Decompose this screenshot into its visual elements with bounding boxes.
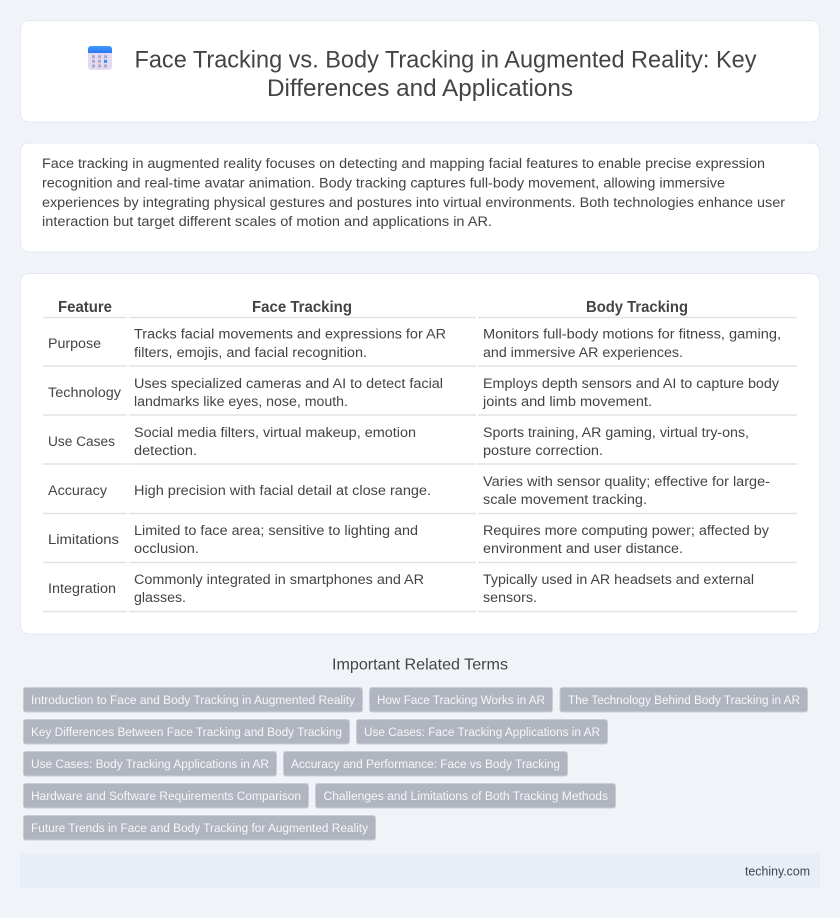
title: Face Tracking vs. Body Tracking in Augmented Reality: Key	[134, 46, 757, 74]
row: Technology: landmarks like eyes, nose, mouth.	[134, 394, 348, 410]
row: Purpose: and immersive AR experiences.	[483, 345, 683, 361]
title: Differences and Applications	[267, 75, 573, 102]
related terms tags: Use Cases: Face Tracking Applications in AR	[364, 725, 600, 739]
panel: title header	[20, 20, 820, 122]
panel: introduction paragraph: experiences by integrating physical gestures and postures into virtual environments. Both technologies enhance user	[42, 195, 785, 211]
table header row: Feature	[58, 299, 112, 316]
row: Integration: sensors.	[483, 590, 537, 606]
row: Technology: joints and limb movement.	[482, 394, 652, 410]
row: Purpose: filters, emojis, and facial recognition.	[134, 345, 367, 361]
row: Limitations: Requires more computing power; affected by	[483, 523, 770, 539]
row: Limitations: Limitations	[48, 532, 119, 548]
row: Use Cases	[48, 425, 749, 459]
row: Accuracy: Accuracy	[48, 483, 108, 499]
footer bar	[20, 854, 820, 888]
row: Accuracy	[48, 474, 770, 508]
row: Accuracy: Varies with sensor quality; effective for large-	[483, 474, 770, 490]
related terms tags: Future Trends in Face and Body Tracking for Augmented Reality	[31, 821, 369, 835]
panel: introduction paragraph: recognition and real-time avatar animation. Body tracking captures full-body movement, allowing immersive	[42, 176, 725, 192]
row: Accuracy: High precision with facial detail at close range.	[134, 483, 431, 499]
row: Purpose: Monitors full-body motions for fitness, gaming,	[483, 326, 781, 342]
heading: Important Related Terms: Important Related Terms	[332, 656, 508, 674]
related terms tags: Challenges and Limitations of Both Tracking Methods	[324, 789, 608, 803]
row: Use Cases: Use Cases	[48, 434, 115, 450]
row: Integration	[48, 572, 754, 606]
related terms tags: How Face Tracking Works in AR	[377, 693, 545, 707]
row: Technology	[48, 376, 780, 410]
row: Purpose: Purpose	[48, 336, 101, 352]
title	[134, 46, 757, 102]
row: Integration: Integration	[48, 581, 116, 597]
panel: comparison table	[20, 274, 820, 634]
row: Integration: Typically used in AR headsets and external	[483, 572, 754, 588]
related terms tags: Accuracy and Performance: Face vs Body Tracking	[291, 757, 560, 771]
row: Use Cases: detection.	[134, 443, 197, 459]
icon: calendar	[88, 46, 112, 70]
related terms tags	[24, 688, 808, 840]
row: Purpose: Tracks facial movements and expressions for AR	[134, 326, 446, 342]
row: Technology: Uses specialized cameras and AI to detect facial	[134, 376, 443, 392]
row: Use Cases: Sports training, AR gaming, virtual try-ons,	[483, 425, 749, 441]
row: Integration: glasses.	[134, 590, 186, 606]
row: Limitations: occlusion.	[134, 541, 199, 557]
related terms tags: Key Differences Between Face Tracking and Body Tracking	[31, 725, 342, 739]
table header row: Face Tracking	[252, 299, 352, 316]
row: Purpose	[48, 326, 781, 361]
panel: introduction paragraph: interaction but target different scales of motion and applications in AR.	[42, 214, 492, 230]
row: Integration: Commonly integrated in smartphones and AR	[134, 572, 424, 588]
table header row: Body Tracking	[586, 299, 688, 316]
panel: introduction paragraph: Face tracking in augmented reality focuses on detecting and mapping facial features to enable precise expression	[42, 156, 765, 172]
row: Accuracy: scale movement tracking.	[483, 492, 647, 508]
panel: introduction paragraph	[20, 143, 820, 252]
table header row	[58, 299, 688, 316]
row: Use Cases: posture correction.	[483, 443, 603, 459]
row: Technology: Technology	[48, 385, 122, 401]
related terms tags: The Technology Behind Body Tracking in AR	[568, 693, 800, 707]
row: Limitations	[48, 523, 770, 557]
related terms tags: Introduction to Face and Body Tracking in Augmented Reality	[31, 693, 356, 707]
row: Use Cases: Social media filters, virtual makeup, emotion	[134, 425, 416, 441]
footer bar: techiny.com	[745, 864, 810, 878]
row: Technology: Employs depth sensors and AI to capture body	[483, 376, 780, 392]
row: Limitations: Limited to face area; sensitive to lighting and	[134, 523, 418, 539]
related terms tags: Use Cases: Body Tracking Applications in AR	[31, 757, 269, 771]
related terms tags: Hardware and Software Requirements Comparison	[31, 789, 301, 803]
row: Limitations: environment and user distance.	[483, 541, 683, 557]
